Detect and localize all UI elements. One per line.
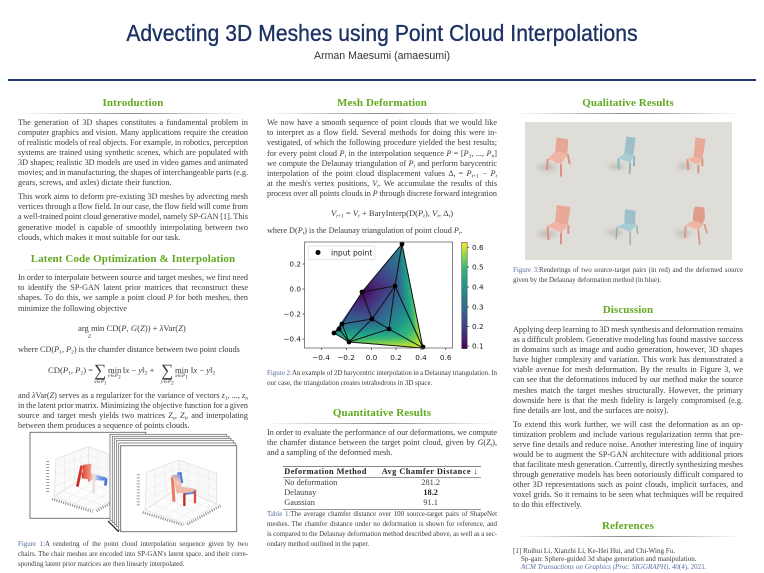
panel: discussion [513, 304, 743, 509]
axis ticks and labels: 0.0 [366, 353, 378, 362]
text: mesh deformation paragraph [267, 118, 497, 198]
equation: chamfer distance: x∈P1 [94, 379, 107, 386]
chart: Delaunay triangulation heatmap [283, 242, 484, 362]
caption: figure 2 [267, 369, 497, 387]
figure 1: point cloud interpolation [18, 432, 248, 568]
text: discussion paragraph 1 [513, 325, 743, 415]
text: introduction paragraph 2: vertices through a flow field. In our case, the flow field will come from [18, 202, 248, 211]
caption: table 1: is compared to the Delaunay deformation method described above, as well as a sec- [267, 530, 497, 538]
figure 2: barycentric interpolation [267, 242, 497, 387]
text: discussion paragraph 2: voxel grids. So it remains to be seen what techniques will be required [513, 490, 743, 499]
text: introduction paragraph 1 [18, 118, 248, 187]
caption: figure 2: Figure 2:An example of 2D barycentric interpolation in a Delaunay triangulation. In [267, 369, 497, 377]
text: introduction paragraph 2: a well-trained point cloud generative model, namely SP-GAN [1]. This [18, 212, 248, 221]
text: discussion paragraph 1: have higher complexity and variation. This work has demonstrated a [513, 355, 743, 364]
text: introduction paragraph 1: movies; and in manufacturing, the shapes of interchangeable parts (e.g. [18, 168, 248, 177]
colorbar [462, 242, 484, 351]
text: discussion paragraph 2: that facilitate mesh generation. Currently, directly synthesizing meshes [513, 460, 743, 469]
text: introduction paragraph 1: The generation of 3D shapes constitutes a fundamental problem in [18, 118, 248, 127]
text: introduction paragraph 2: This work aims to deform pre-existing 3D meshes by advecting mesh [18, 192, 248, 201]
equation: chamfer distance: min [108, 365, 121, 375]
text: discussion paragraph 2: To extend this work further, we will cast the deformation as an op- [513, 420, 743, 429]
plot frame: second chair [121, 446, 237, 532]
text: mesh deformation paragraph: We now have a smooth sequence of point clouds that we would like [267, 118, 497, 127]
axis ticks and labels: 0.6 [440, 353, 452, 362]
text: latent intro [18, 273, 248, 313]
axis ticks and labels: 0.4 [415, 353, 427, 362]
text: discussion paragraph 2: through generative models has been notoriously difficult compared to [513, 470, 743, 479]
chair: bottom right target [685, 207, 707, 245]
equation: forward integration: Vt+1 = Vt + BaryInterp(D(Pt), Vt, Δt) [331, 208, 453, 220]
panel: quantitative results [267, 407, 497, 548]
text: discussion paragraph 1: downside here is that the mesh fidelity is largely compromised (e.g. [513, 396, 743, 405]
equation: chamfer distance: y∈P2 [108, 373, 121, 380]
panel: qualitative results [513, 97, 743, 284]
table: chamfer distance: 281.2 [421, 478, 440, 487]
text: latent intro: shapes. To do this, we sample a point cloud P for both meshes, then [18, 293, 248, 302]
reference entry [513, 546, 706, 571]
panel: latent code optimization [18, 253, 248, 430]
text: discussion paragraph 1: Applying deep learning to 3D mesh synthesis and deformation remains [513, 325, 743, 334]
caption: figure 3 [513, 266, 743, 284]
equation: chamfer distance: y∈P2 [161, 379, 174, 386]
axis ticks and labels: 0.2 [289, 260, 301, 269]
header rule [8, 79, 756, 81]
legend [308, 246, 375, 260]
table: chamfer distance: Deformation Method [284, 467, 367, 476]
equation: objective: arg min CD(P, G(Z)) + λVar(Z) [78, 323, 186, 333]
axis ticks and labels [283, 260, 452, 362]
text: quantitative results paragraph [267, 428, 497, 457]
equation: chamfer distance: x∈P1 [175, 373, 188, 380]
text: introduction paragraph 1: computer graphics and vision. Many applications require the creation [18, 128, 248, 137]
text: discussion paragraph 2: would be to augment the SP-GAN architecture with additional priors [513, 450, 743, 459]
text: regularizer: in the latent prior matrix. Minimizing the objective function for a given [18, 401, 248, 410]
colorbar: 0.3 [472, 303, 484, 312]
text: quantitative results paragraph: In order to evaluate the performance of our deformations, we compute [267, 428, 497, 437]
text: discussion paragraph 1: fine details are lost, and the surfaces are noisy). [513, 406, 669, 415]
caption: figure 1 [18, 540, 248, 568]
text: introduction paragraph 1: 3D shapes; realistic 3D models are used in video games and animated [18, 158, 248, 167]
axis ticks and labels: −0.2 [337, 353, 355, 362]
image: chair renderings [525, 122, 732, 260]
plot frame: first chair [30, 432, 146, 518]
text: regularizer: between them produces a sequence of points clouds. [18, 421, 189, 430]
caption: figure 1: chairs. The chair meshes are encoded into SP-GAN's latent space, and their corre- [18, 550, 248, 558]
table: chamfer distance: 18.2 [423, 488, 438, 497]
text: introduction paragraph 1: systems are trained using synthetic scenes, which are populated with [18, 148, 248, 157]
plot stack: 3D chair plots [30, 432, 238, 532]
heading: latent code optimization: Latent Code Optimization & Interpolation [31, 253, 235, 265]
input points [332, 242, 425, 349]
heading: qualitative results: Qualitative Results [582, 97, 674, 109]
text: discussion paragraph 1: viable avenue for mesh deformation. By the results in Figure 3, we [513, 365, 743, 374]
text: discussion paragraph 2: serve fine details and reduce noise. Another interesting line of inquiry [513, 440, 743, 449]
chair: bottom centre deformed [616, 209, 638, 245]
text: discussion paragraph 2 [513, 420, 743, 509]
reference entry: ACM Transactions on Graphics (Proc. SIGGRAPH), 40(4), 2021. [521, 563, 706, 571]
chair: bottom left target [547, 205, 571, 244]
text: mesh deformation paragraph: to interpret as a flow field. Several methods for doing this were in- [267, 128, 497, 137]
equation: chamfer distance: min [175, 365, 188, 375]
triangulation edges [334, 244, 423, 348]
chair: top right target [687, 137, 706, 173]
colorbar: 0.4 [472, 283, 484, 292]
text: discussion paragraph 1: in domains such as image and audio generation, however, 3D shapes [513, 345, 743, 354]
table: chamfer distance [283, 466, 481, 510]
caption: figure 1: sponding latent prior matrices are then linearly interpolated. [18, 560, 184, 568]
text: latent intro: In order to interpolate between source and target meshes, we first need [18, 273, 248, 282]
heatmap triangles [334, 244, 423, 348]
text: introduction paragraph 1: of realistic models of real objects. For example, in robotics, perception [18, 138, 248, 147]
panel: references [513, 520, 734, 571]
text: mesh deformation paragraph: vestigated, of which the following procedure yielded the best results; [267, 138, 497, 147]
equation: chamfer distance: ∑ [94, 361, 106, 380]
table: chamfer distance: Avg Chamfer Distance ↓ [382, 467, 478, 476]
text: discussion paragraph 1: meshes match the target meshes structurally. However, the primary [513, 386, 743, 395]
axis ticks and labels: −0.4 [312, 353, 330, 362]
heading: references: References [602, 520, 654, 532]
chair: top centre deformed [618, 137, 636, 174]
equation: chamfer distance: ‖x − y‖2 [191, 365, 215, 376]
heading: introduction: Introduction [103, 97, 163, 109]
caption: figure 3: given by the Delaunay deformation method (in blue). [513, 276, 661, 284]
colorbar: 0.6 [472, 243, 484, 252]
caption: table 1: Table 1:The average chamfer distance over 100 source-target pairs of ShapeNet [267, 510, 497, 518]
axis ticks and labels: −0.2 [283, 310, 301, 319]
text: introduction paragraph 2: clouds, which makes it most suitable for our task. [18, 233, 180, 242]
heading: quantitative results: Quantitative Results [333, 407, 431, 419]
text: quantitative results paragraph: and a sampling of the deformed mesh. [267, 448, 392, 457]
reference entry: Sp-gan: Sphere-guided 3d shape generation and manipulation. [521, 555, 697, 563]
text: mesh deformation paragraph: process over all points clouds in P through discrete forward integration [267, 189, 497, 198]
text: discussion paragraph 1: as a difficult problem. Generative modeling has found massive success [513, 335, 743, 344]
text: latent intro: to identify the SP-GAN latent prior matrices that reconstruct these [18, 283, 248, 292]
stacked frames [110, 434, 235, 530]
axis ticks and labels: 0.2 [390, 353, 402, 362]
title: Advecting 3D Meshes using Point Cloud Interpolations [126, 20, 638, 46]
table: chamfer distance: No deformation [284, 478, 337, 487]
table: chamfer distance: Delaunay [284, 488, 316, 497]
heading: discussion: Discussion [603, 304, 653, 316]
colorbar: 0.5 [472, 263, 484, 272]
colorbar: 0.1 [472, 342, 484, 351]
equation: chamfer distance: ‖x − y‖2 + [123, 365, 154, 376]
chair: top left target [547, 137, 570, 177]
caption: table 1: ondary method outlined in the paper. [267, 540, 369, 548]
heading: mesh deformation: Mesh Deformation [337, 97, 427, 109]
caption: table 1 [267, 510, 497, 548]
table: chamfer distance: 91.1 [423, 498, 438, 507]
equation: objective [78, 323, 186, 340]
equation: chamfer distance: CD(P1, P2) = [48, 365, 93, 376]
panel: mesh deformation [267, 97, 497, 236]
caption: table 1: meshes. The chamfer distance under no deformation is shown for reference, and [267, 520, 497, 528]
equation: chamfer distance [48, 361, 216, 386]
text: discussion paragraph 2: to do this effectively. [513, 500, 582, 509]
legend: input point [331, 248, 372, 257]
reference entry: [1] Ruihui Li, Xianzhi Li, Ke-Hei Hui, and Chi-Wing Fu. [513, 546, 675, 554]
equation: chamfer distance: ∑ [161, 361, 173, 380]
table: chamfer distance: Gaussian [284, 498, 315, 507]
text: discussion paragraph 2: timization problem and include various regularization terms that pre- [513, 430, 743, 439]
caption: figure 2: our case, the triangulation creates tetrahedrons in 3D space. [267, 379, 432, 387]
text: introduction paragraph 2 [18, 192, 248, 242]
text: regularizer [18, 391, 248, 430]
colorbar: 0.2 [472, 322, 484, 331]
equation: objective: Z [88, 334, 91, 340]
axis ticks and labels: 0.0 [289, 285, 301, 294]
author: Arman Maesumi (amaesumi) [314, 50, 450, 62]
text: discussion paragraph 1: can see that the deformations induced by our method make the source [513, 375, 743, 384]
text: discussion paragraph 2: other 3D representations such as point clouds, implicit surfaces, and [513, 480, 743, 489]
panel: introduction [18, 97, 248, 242]
text: introduction paragraph 1: gears, screws, and axles) dictate their function. [18, 178, 171, 187]
axes frame [304, 242, 452, 348]
text: latent intro: minimize the following objective [18, 304, 127, 313]
axis ticks and labels: −0.4 [283, 335, 301, 344]
